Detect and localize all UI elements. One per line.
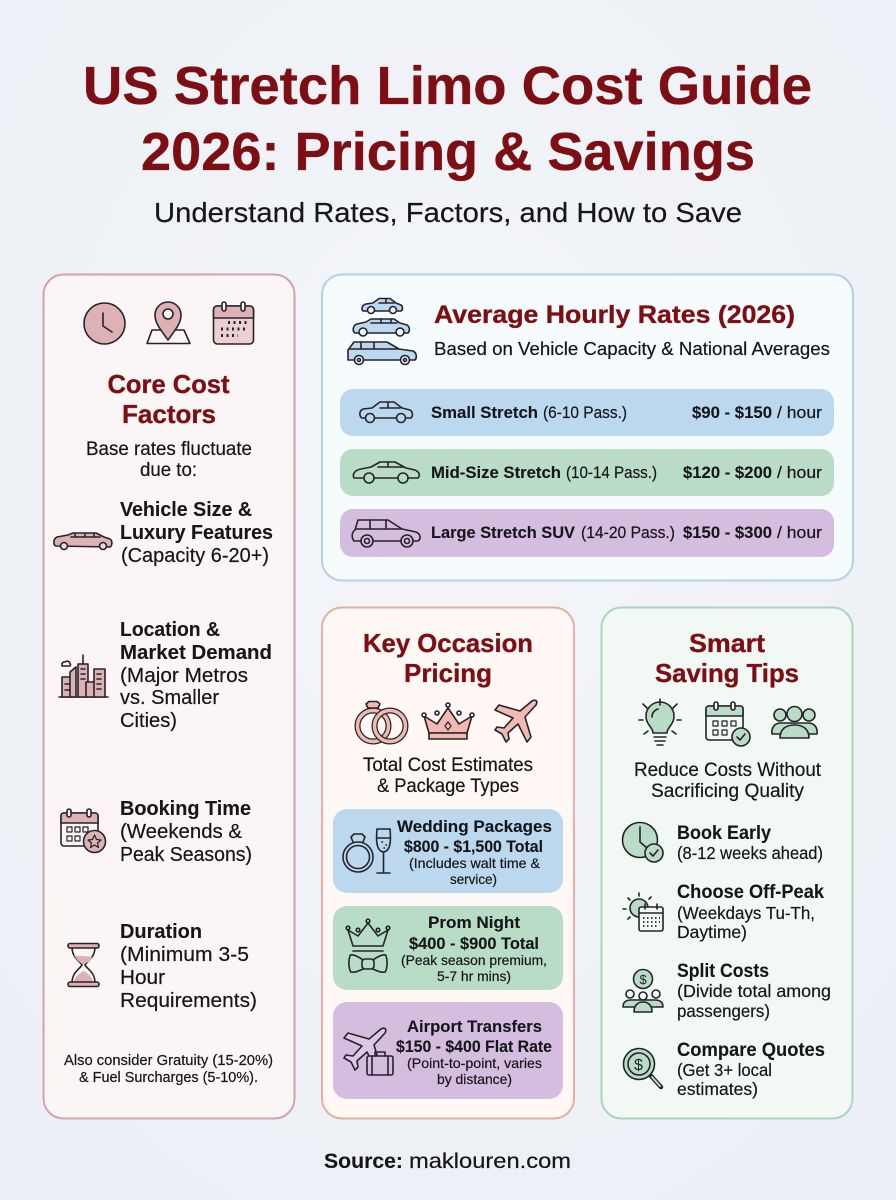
tip: split costs [677,961,831,1021]
rate row: mid-size stretch: / hour [777,464,823,482]
factor: vehicle size [120,499,273,567]
rate row: large stretch suv: / hour [777,524,823,542]
panel background [322,274,853,580]
tip: split costs: Split Costs [677,961,769,982]
icon: calendar with check [706,702,750,746]
icon: hourglass [68,944,99,986]
rate row: large stretch suv [340,509,834,557]
icon: small car [360,402,412,422]
subheading: Based on Vehicle Capacity & National Averages [434,339,830,359]
factor: location: Cities) [120,710,177,732]
tips intro text: Sacrificing Quality [651,781,804,802]
heading: key occasion pricing: Key Occasion [363,628,533,658]
icon: calendar with star [61,809,106,852]
icon: light bulb [639,699,681,745]
panel: key occasion pricing [322,608,574,1118]
card: airport transfers: Airport Transfers [407,1017,542,1036]
icon: stacked cars [348,298,416,364]
icon: dollar coin over people [623,970,663,1012]
factor: booking time: Booking Time [120,798,251,820]
tip: compare quotes: estimates) [677,1079,758,1099]
factor: booking time [120,798,252,866]
icon: rings [358,702,406,742]
factor: location: Market Demand [120,642,272,664]
icon: magnifier with dollar [624,1048,661,1087]
tip: book early [677,823,823,863]
panel: core cost factors [44,274,294,1118]
rate row: small stretch: (6-10 Pass.) [543,404,627,422]
intro text [86,439,252,481]
factor: booking time: Peak Seasons) [120,844,252,866]
tips intro text [634,760,822,802]
factor: duration: Hour [120,967,165,989]
icon: map pin [147,302,190,344]
icon: ring and champagne glass [343,829,390,873]
icon: sun and calendar [623,893,663,931]
factor: vehicle size: Luxury Features [120,522,273,544]
panel background [44,274,294,1118]
intro text: due to: [140,460,197,481]
panel background [602,608,852,1118]
subtitle: Understand Rates, Factors, and How to Save [154,197,742,228]
factor: duration: Duration [120,921,202,943]
factor: location: (Major Metros [120,665,248,687]
tip: book early: Book Early [677,823,771,844]
icon: limousine [54,533,112,550]
icon: crown [422,703,474,739]
panel: average hourly rates [322,274,853,580]
tip: choose off-peak: Daytime) [677,922,747,942]
title: 2026: Pricing & Savings [141,122,755,182]
icon: magnifier with dollar: $ [634,1057,643,1074]
heading: average hourly rates: Average Hourly Rates (2026) [434,301,795,329]
icon: calendar [214,302,254,344]
title: US Stretch Limo Cost Guide [83,56,812,116]
rate row: mid-size stretch: (10-14 Pass.) [566,464,657,482]
heading: smart saving tips [655,628,799,688]
panel: smart saving tips [602,608,852,1118]
heading: key occasion pricing: Pricing [404,658,492,688]
heading: core cost factors: Factors [122,399,216,429]
factor: vehicle size: Vehicle Size & [120,499,252,521]
rate row: large stretch suv: (14-20 Pass.) [581,524,675,542]
card: airport transfers: (Point-to-point, varies [407,1055,542,1071]
footnote [64,1052,273,1086]
rate row: small stretch: $90 - $150 [692,404,772,422]
icon: airplane [495,700,537,742]
card: wedding packages: service) [450,871,497,887]
heading: smart saving tips: Saving Tips [655,658,799,688]
title [83,56,812,182]
icon: group of people [772,706,817,738]
rate row: small stretch: Small Stretch [431,404,538,422]
heading: core cost factors [108,369,230,429]
icon: suv [352,520,420,547]
tip: split costs: (Divide total among [677,981,831,1001]
source line: Source: [324,1150,403,1173]
card: wedding packages: $800 - $1,500 Total [404,837,543,856]
tip: choose off-peak: Choose Off-Peak [677,882,824,903]
source line [324,1150,571,1173]
occasion intro text: Total Cost Estimates [363,755,533,776]
icon: crown and bow tie [346,919,390,972]
rate row: large stretch suv: Large Stretch SUV [431,524,575,542]
tip: choose off-peak [677,882,824,942]
rate row: mid-size stretch [340,449,834,496]
card: airport transfers [333,1002,563,1099]
tip: compare quotes: (Get 3+ local [677,1060,772,1080]
factor: location [120,619,272,732]
factor: location: Location & [120,619,220,641]
card: airport transfers: $150 - $400 Flat Rate [396,1037,552,1056]
panel background [322,608,574,1118]
tip: choose off-peak: (Weekdays Tu-Th, [677,903,815,923]
heading: key occasion pricing [363,628,533,688]
factor: duration: (Minimum 3-5 [120,944,249,966]
tip: compare quotes: Compare Quotes [677,1040,825,1061]
occasion intro text: & Package Types [377,776,519,797]
tip: compare quotes [677,1040,825,1099]
rate row: mid-size stretch: $120 - $200 [683,464,772,482]
rate row: large stretch suv: $150 - $300 [683,524,772,542]
card: prom night: $400 - $900 Total [409,934,539,953]
factor: duration [120,921,257,1012]
rate row: small stretch: / hour [777,404,823,422]
icon: mid-size car [353,462,419,483]
factor: booking time: (Weekends & [120,821,243,843]
card: prom night: 5-7 hr mins) [437,968,511,984]
heading: smart saving tips: Smart [689,628,765,658]
tips intro text: Reduce Costs Without [634,760,822,781]
card: prom night: Prom Night [428,913,520,932]
icon: city skyline [59,655,108,697]
footnote: & Fuel Surcharges (5-10%). [79,1069,258,1086]
tip: split costs: passengers) [677,1001,770,1021]
card: prom night [333,906,563,990]
intro text: Base rates fluctuate [86,439,252,460]
card: wedding packages [333,809,563,893]
card: wedding packages: Wedding Packages [397,817,552,836]
source line: maklouren.com [409,1150,571,1173]
factor: duration: Requirements) [120,990,257,1012]
card: wedding packages: (Includes walt time & [409,855,541,871]
factor: vehicle size: (Capacity 6-20+) [121,545,269,567]
icon: clock [84,303,125,344]
card: airport transfers: by distance) [437,1071,512,1087]
icon: airplane and suitcase [344,1028,393,1075]
factor: location: vs. Smaller [120,687,219,709]
rate row: mid-size stretch: Mid-Size Stretch [431,464,561,482]
icon: clock with check [622,822,663,862]
rate row: small stretch [340,389,834,436]
tip: book early: (8-12 weeks ahead) [677,843,823,863]
footnote: Also consider Gratuity (15-20%) [64,1052,273,1069]
icon: dollar coin over people: $ [640,972,648,987]
card: prom night: (Peak season premium, [401,952,547,968]
heading: core cost factors: Core Cost [108,369,230,399]
occasion intro text [363,755,533,797]
